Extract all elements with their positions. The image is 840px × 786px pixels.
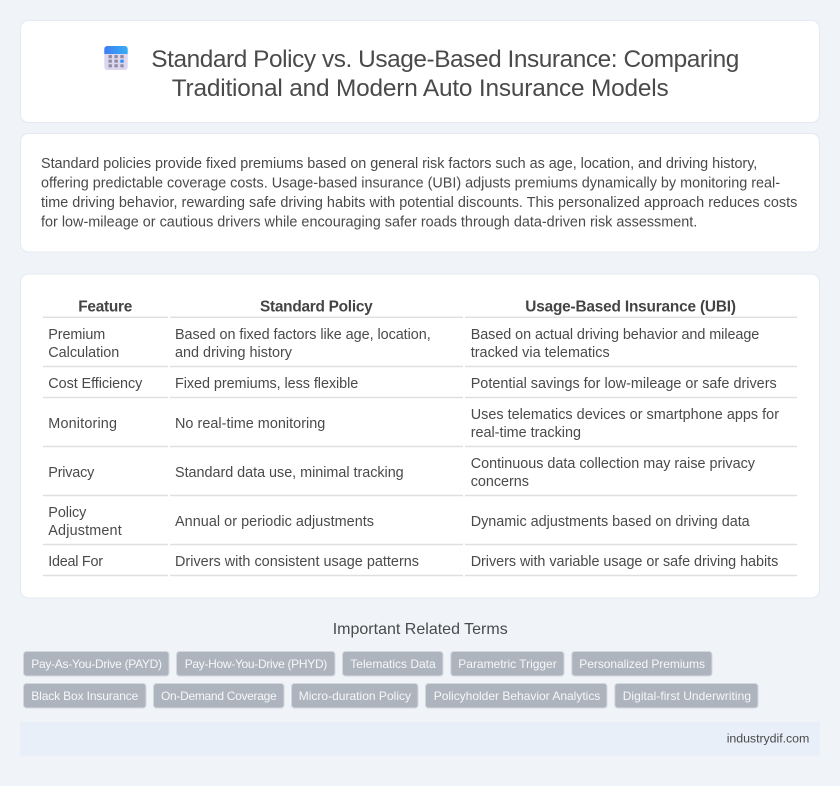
- text block: summary: for low-mileage or cautious drivers while encouraging safer roads through data-driven risk assessment.: [41, 214, 697, 230]
- panel: intro paragraph: [20, 134, 820, 252]
- table header row: [78, 299, 736, 316]
- row: monitoring: real-time tracking: [471, 425, 581, 441]
- row: privacy: concerns: [471, 474, 529, 490]
- tag labels: Policyholder Behavior Analytics: [434, 689, 600, 703]
- title: Standard Policy vs. Usage-Based Insurance: Comparing: [151, 46, 739, 73]
- row: premium calculation: Based on actual driving behavior and mileage: [471, 327, 759, 343]
- title: [151, 46, 739, 102]
- tag labels: Black Box Insurance: [31, 689, 139, 703]
- tag labels: [31, 657, 751, 703]
- tag labels: Telematics Data: [350, 657, 436, 671]
- row: privacy: [48, 456, 756, 490]
- row: policy adjustment: [48, 505, 750, 539]
- table header row: Feature: [78, 299, 133, 316]
- row: premium calculation: [48, 327, 759, 361]
- tag labels: Personalized Premiums: [579, 657, 705, 671]
- row: cost efficiency: Potential savings for low-mileage or safe drivers: [471, 376, 777, 392]
- row: cost efficiency: [48, 376, 777, 392]
- text block: summary: Standard policies provide fixed premiums based on general risk factors such as age, location, and driving history,: [41, 156, 757, 172]
- tag labels: Parametric Trigger: [458, 657, 557, 671]
- tag labels: Pay-How-You-Drive (PHYD): [185, 657, 327, 671]
- row: ideal for: Drivers with consistent usage patterns: [175, 554, 419, 570]
- row: ideal for: Ideal For: [48, 554, 103, 570]
- table rules: [43, 317, 797, 576]
- footer bar: [20, 722, 820, 756]
- row: premium calculation: Based on fixed factors like age, location,: [175, 327, 431, 343]
- tag group: related terms: [24, 652, 758, 708]
- table header row: Usage-Based Insurance (UBI): [525, 299, 736, 316]
- heading: important related terms: Important Related Terms: [333, 621, 508, 638]
- row: monitoring: [48, 407, 779, 441]
- row: monitoring: Monitoring: [48, 416, 117, 432]
- text block: summary: offering predictable coverage costs. Usage-based insurance (UBI) adjusts premiums dynamically by monitoring real-: [41, 176, 780, 192]
- row: privacy: Continuous data collection may raise privacy: [471, 456, 756, 472]
- tag labels: Pay-As-You-Drive (PAYD): [31, 657, 162, 671]
- row: cost efficiency: Fixed premiums, less flexible: [175, 376, 358, 392]
- row: privacy: Standard data use, minimal tracking: [175, 465, 404, 481]
- row: premium calculation: Calculation: [48, 345, 119, 361]
- icon: calendar: [104, 46, 128, 70]
- row: premium calculation: tracked via telematics: [471, 345, 610, 361]
- row: premium calculation: and driving history: [175, 345, 293, 361]
- text block: summary: [41, 156, 797, 230]
- row: cost efficiency: Cost Efficiency: [48, 376, 143, 392]
- panel: title header: [20, 20, 820, 122]
- row: policy adjustment: Policy: [48, 505, 87, 521]
- table header row: Standard Policy: [260, 299, 373, 316]
- title: Traditional and Modern Auto Insurance Models: [172, 75, 669, 102]
- row: premium calculation: Premium: [48, 327, 105, 343]
- text block: summary: time driving behavior, rewarding safe driving habits with potential discounts. This personalized approach reduces costs: [41, 195, 797, 211]
- tag labels: On-Demand Coverage: [161, 689, 277, 703]
- tag labels: Digital-first Underwriting: [623, 689, 751, 703]
- row: policy adjustment: Dynamic adjustments based on driving data: [471, 514, 750, 530]
- panel: comparison table: [20, 274, 820, 598]
- tag labels: Micro-duration Policy: [299, 689, 411, 703]
- row: policy adjustment: Adjustment: [48, 523, 122, 539]
- footer source: industrydif.com: [727, 732, 809, 746]
- row: ideal for: [48, 554, 778, 570]
- row: policy adjustment: Annual or periodic adjustments: [175, 514, 374, 530]
- row: privacy: Privacy: [48, 465, 95, 481]
- row: monitoring: Uses telematics devices or smartphone apps for: [471, 407, 779, 423]
- row: monitoring: No real-time monitoring: [175, 416, 325, 432]
- row: ideal for: Drivers with variable usage or safe driving habits: [471, 554, 778, 570]
